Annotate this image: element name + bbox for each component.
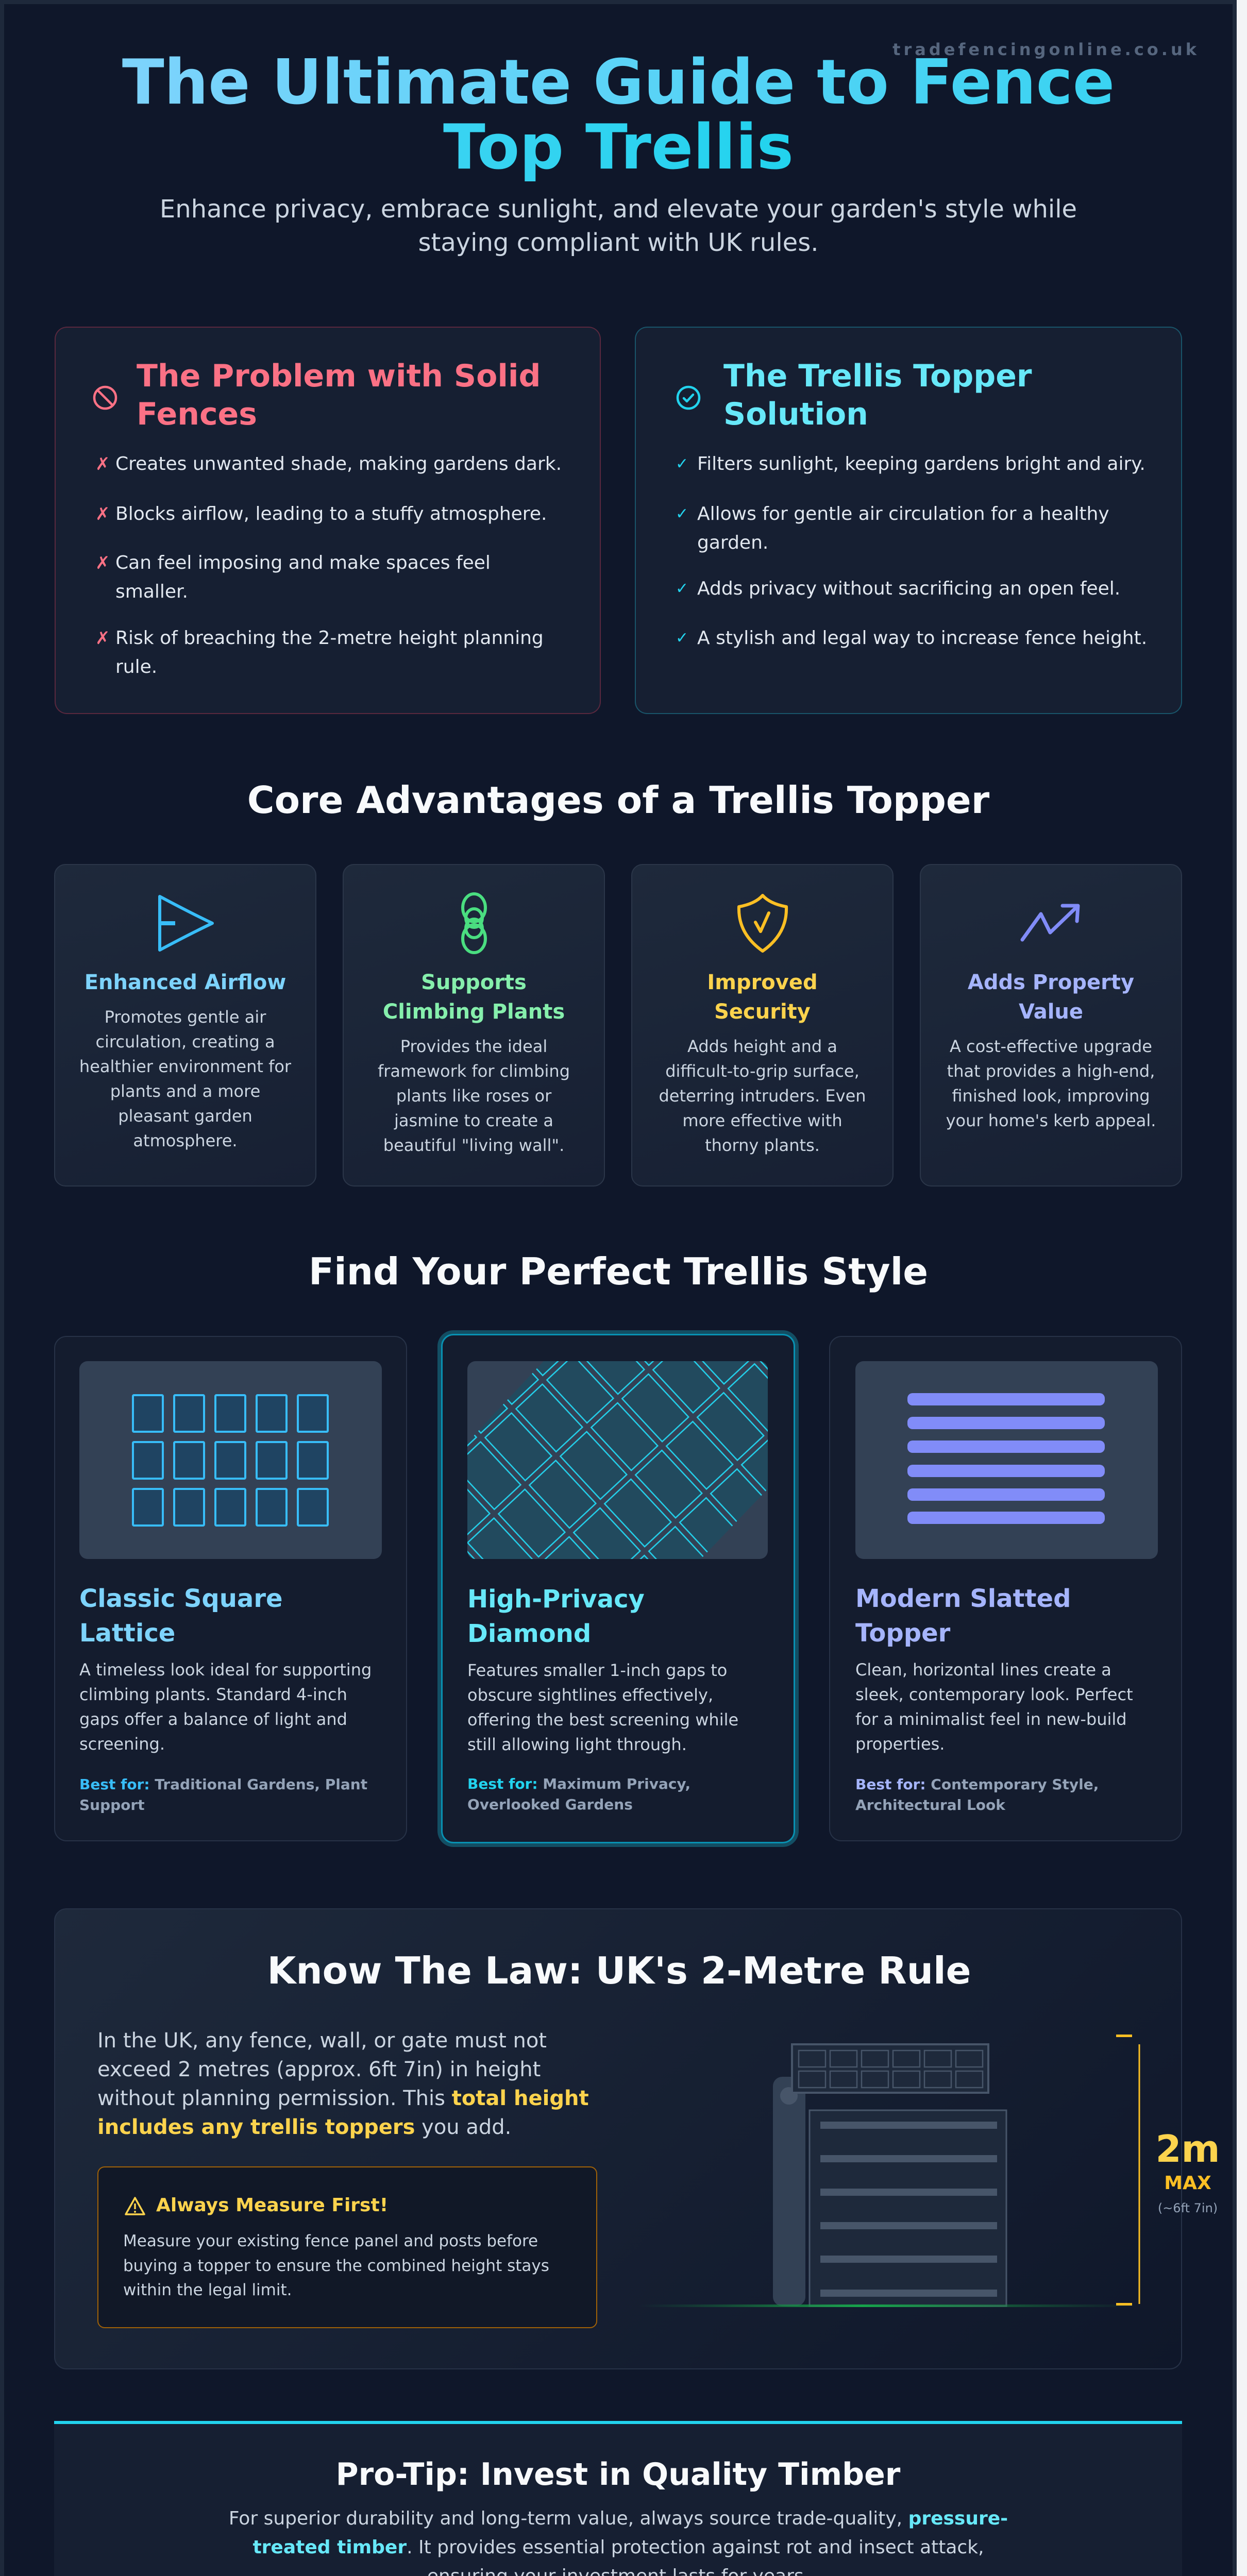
icon: trend up [1020, 904, 1080, 942]
label: 2m max: MAX [1164, 2173, 1211, 2194]
trellis topper [792, 2044, 988, 2093]
title [122, 47, 1115, 183]
callout text: Measure your existing fence panel and posts before buying a topper to ensure the combined height stays within the legal limit. [123, 2232, 549, 2299]
best for: Best for: Traditional Gardens, Plant Support [79, 1776, 367, 1814]
image: diamond lattice [467, 1361, 768, 1559]
fence illustration [656, 2035, 1220, 2307]
title: High-Privacy Diamond [467, 1585, 645, 1648]
subtitle: Enhance privacy, embrace sunlight, and elevate your garden's style while staying compliant with UK rules. [160, 195, 1077, 257]
card: climbing plants [343, 864, 605, 1187]
list: problems: Creates unwanted shade, making gardens dark. [115, 453, 562, 474]
callout heading: Always Measure First! [156, 2195, 388, 2216]
list: benefits: ✓ [676, 505, 688, 523]
post [773, 2077, 805, 2306]
card: airflow [54, 864, 316, 1187]
card: climbing plants: Provides the ideal framework for climbing plants like roses or jasmine to create a beautiful "living wall". [378, 1037, 570, 1155]
list: benefits: ✓ [676, 629, 688, 647]
list: problems: ✗ [95, 553, 110, 573]
list: problems: Blocks airflow, leading to a stuffy atmosphere. [115, 503, 547, 524]
card: security: Adds height and a difficult-to-grip surface, deterring intruders. Even more effective with thorny plants. [659, 1037, 866, 1155]
card: property value: Adds Property Value [968, 971, 1134, 1024]
list: problems: ✗ [95, 504, 110, 524]
best for: Best for: Maximum Privacy, Overlooked Gardens [467, 1775, 690, 1813]
heading: solution: The Trellis Topper Solution [723, 358, 1032, 432]
heading: trellis style: Find Your Perfect Trellis Style [309, 1250, 928, 1293]
card: airflow: Promotes gentle air circulation, creating a healthier environment for plants and a more pleasant garden atmosphere. [79, 1007, 291, 1150]
description: Clean, horizontal lines create a sleek, contemporary look. Perfect for a minimalist feel in new-build properties. [855, 1660, 1133, 1754]
panel: UK law [54, 1908, 1182, 2369]
icon: no sign [93, 385, 117, 410]
card: security: Improved Security [707, 971, 818, 1024]
list: benefits: ✓ [676, 455, 688, 473]
measurement line [1116, 2035, 1139, 2306]
icon: check circle [676, 385, 701, 410]
card: classic square lattice [54, 1336, 407, 1841]
best for: Best for: Contemporary Style, Architectural Look [855, 1776, 1099, 1814]
heading: pro tip: Pro-Tip: Invest in Quality Timber [336, 2456, 900, 2493]
list: problems: ✗ [95, 454, 110, 474]
icon: links [461, 892, 487, 954]
card: property value: A cost-effective upgrade that provides a high-end, finished look, improving your home's kerb appeal. [946, 1037, 1156, 1130]
card: property value [920, 864, 1182, 1187]
list: problems: Risk of breaching the 2-metre height planning rule. [115, 628, 544, 677]
list: benefits: A stylish and legal way to increase fence height. [697, 628, 1147, 649]
list: benefits: Adds privacy without sacrificing an open feel. [697, 578, 1120, 599]
panel: pro tip [54, 2421, 1182, 2576]
card: airflow: Enhanced Airflow [85, 971, 286, 994]
card: high-privacy diamond [441, 1334, 795, 1843]
description: A timeless look ideal for supporting climbing plants. Standard 4-inch gaps offer a balance of light and screening. [79, 1660, 372, 1754]
fence panel [810, 2110, 1006, 2306]
ground [638, 2304, 1137, 2307]
image: slats [855, 1361, 1158, 1559]
card: security [631, 864, 894, 1187]
title: Top Trellis [443, 112, 794, 183]
heading: core advantages: Core Advantages of a Trellis Topper [247, 778, 989, 822]
list: benefits [676, 453, 1147, 649]
title: Modern Slatted Topper [855, 1584, 1071, 1648]
icon: shield [737, 894, 788, 953]
description: Features smaller 1-inch gaps to obscure sightlines effectively, offering the best screening while still allowing light through. [467, 1660, 738, 1754]
card: climbing plants: Supports Climbing Plants [383, 971, 565, 1024]
label: 2m max: (~6ft 7in) [1158, 2201, 1218, 2215]
list: problems [95, 453, 562, 677]
image: square lattice [79, 1361, 382, 1559]
list: benefits: ✓ [676, 580, 688, 598]
callout: measure first [97, 2166, 597, 2328]
card: modern slatted [829, 1336, 1182, 1841]
icon: airflow arrow [158, 895, 214, 952]
panel: solution [635, 327, 1182, 714]
label: 2m max: 2m [1155, 2127, 1220, 2171]
icon: warning [125, 2197, 145, 2215]
watermark top: tradefencingonline.co.uk [892, 40, 1200, 59]
heading: law: Know The Law: UK's 2-Metre Rule [267, 1949, 971, 1992]
text: law explanation: In the UK, any fence, wall, or gate must not exceed 2 metres (approx. 6ft 7in) in height without planning permission. This total height includes any trellis toppers you add. [97, 2029, 589, 2139]
title: The Ultimate Guide to Fence [122, 47, 1115, 118]
label: 2m max [1155, 2127, 1220, 2215]
heading: problem: The Problem with Solid Fences [137, 358, 541, 432]
title: Classic Square Lattice [79, 1584, 283, 1648]
list: problems: Can feel imposing and make spaces feel smaller. [115, 552, 491, 602]
list: problems: ✗ [95, 628, 110, 649]
list: benefits: Filters sunlight, keeping gardens bright and airy. [697, 453, 1145, 474]
panel: problem [55, 327, 601, 714]
list: benefits: Allows for gentle air circulation for a healthy garden. [697, 503, 1109, 553]
